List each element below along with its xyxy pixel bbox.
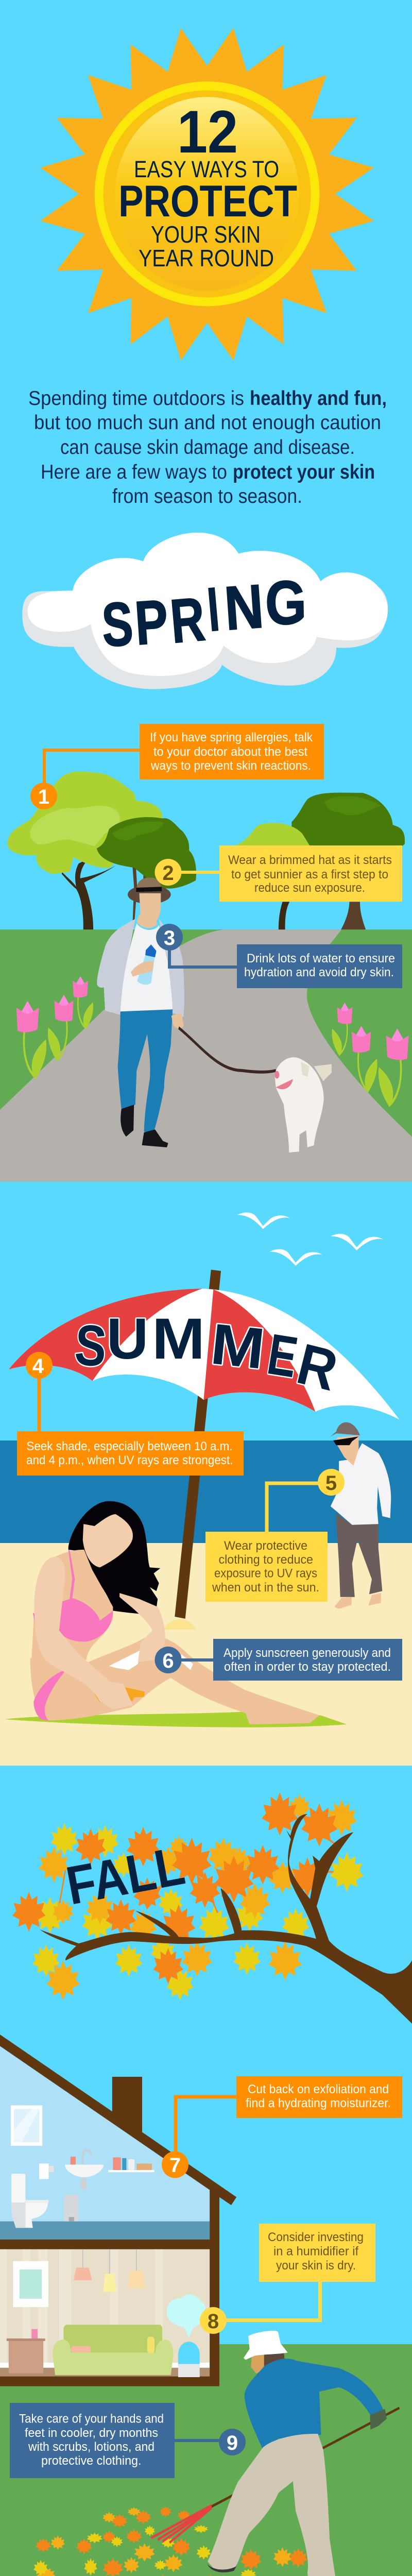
heading: spring: S <box>100 589 135 659</box>
callout 9: feet in cooler, dry months <box>25 2426 158 2440</box>
callout 5: when out in the sun. <box>212 1581 319 1595</box>
callout 6: 6 <box>162 1650 174 1672</box>
callout 7 <box>162 2076 402 2178</box>
callout 8 <box>200 2224 375 2334</box>
tulips <box>16 976 408 1107</box>
heading: summer: S <box>73 1312 109 1379</box>
callout 2: to get sunnier as a first step to <box>231 868 388 882</box>
callout 8: 8 <box>208 2310 219 2333</box>
icon: sun <box>40 28 374 361</box>
intro text: but too much sun and not enough caution <box>34 412 381 434</box>
callout 6 <box>154 1639 402 1681</box>
heading: summer: U <box>107 1307 148 1371</box>
panel: summer <box>0 1212 412 1766</box>
panel: header <box>28 28 387 507</box>
garden ground <box>0 2344 412 2576</box>
heading: summer: R <box>291 1331 344 1403</box>
intro text: can cause skin damage and disease. <box>60 436 355 459</box>
callout 8: in a humidifier if <box>273 2244 358 2259</box>
callout 8: your skin is dry. <box>276 2259 356 2273</box>
callout 1: 1 <box>38 786 49 808</box>
dog <box>274 1057 332 1153</box>
cloud <box>22 533 388 689</box>
callout 6: Apply sunscreen generously and <box>224 1646 391 1660</box>
callout 3: hydration and avoid dry skin. <box>244 965 394 979</box>
ground: grass and path <box>0 929 412 1181</box>
woman applying sunscreen <box>5 1501 347 1727</box>
callout 2: Wear a brimmed hat as it starts <box>228 853 392 867</box>
callout 7: 7 <box>169 2154 181 2177</box>
callout 5: Wear protective <box>224 1539 307 1553</box>
callout 5: exposure to UV rays <box>214 1566 317 1581</box>
heading: summer <box>73 1307 344 1403</box>
heading: summer: M <box>152 1307 205 1371</box>
intro text: Here are a few ways to <box>41 461 227 483</box>
autumn branch with leaves <box>12 1792 412 2024</box>
panel: spring <box>0 533 412 1181</box>
heading: summer: E <box>263 1321 302 1389</box>
callout 2: 2 <box>162 862 174 885</box>
roof and house frame <box>0 2035 236 2386</box>
heading: spring: R <box>168 584 208 656</box>
callout 3 <box>156 924 402 988</box>
leash <box>179 1028 276 1072</box>
sea and sand <box>0 1440 412 1766</box>
leaf pile <box>25 2506 308 2576</box>
heading: spring: G <box>265 568 307 638</box>
callout 5 <box>205 1469 345 1602</box>
man figure <box>151 2331 400 2576</box>
title: 12 <box>177 98 238 165</box>
callout 7: Cut back on exfoliation and <box>248 2082 389 2096</box>
callout 1: to your doctor about the best <box>153 745 307 759</box>
humidifier <box>167 2294 205 2377</box>
intro text: protect your skin <box>233 461 375 483</box>
living room <box>7 2249 174 2375</box>
callout 1 <box>30 724 324 809</box>
title: PROTECT <box>118 177 297 226</box>
trees <box>7 771 405 929</box>
heading: fall: FALL <box>62 1836 189 1917</box>
callout 2: reduce sun exposure. <box>254 881 365 895</box>
title: YOUR SKIN <box>151 221 261 248</box>
heading: spring: I <box>204 574 222 645</box>
callout 1: If you have spring allergies, talk <box>150 731 313 744</box>
callout 4: Seek shade, especially between 10 a.m. <box>27 1439 233 1453</box>
callout 5: 5 <box>325 1472 337 1495</box>
birds <box>237 1212 383 1266</box>
intro text <box>28 387 387 507</box>
callout 3: 3 <box>164 927 175 950</box>
callout 4: 4 <box>32 1355 44 1378</box>
callout 9 <box>10 2403 246 2478</box>
man raking leaves <box>25 2331 400 2576</box>
callout 4 <box>17 1352 244 1476</box>
bathroom fixtures <box>11 2150 154 2228</box>
intro text: from season to season. <box>112 485 302 507</box>
man walking with water bottle <box>97 877 184 1147</box>
callout 6: often in order to stay protected. <box>224 1660 391 1674</box>
intro text: healthy and fun, <box>250 387 387 410</box>
callout 9: protective clothing. <box>41 2454 141 2468</box>
callout 1: ways to prevent skin reactions. <box>150 759 311 773</box>
callout 9: 9 <box>227 2432 238 2454</box>
heading: spring: P <box>133 587 170 658</box>
bathroom window <box>11 2105 42 2146</box>
callout 9: Take care of your hands and <box>19 2412 164 2426</box>
callout 8: Consider investing <box>268 2230 364 2244</box>
house cutaway <box>0 2035 236 2386</box>
callout 7: find a hydrating moisturizer. <box>246 2096 391 2110</box>
man in white shirt <box>331 1422 391 1609</box>
title: EASY WAYS TO <box>134 156 279 182</box>
heading: spring <box>100 568 307 659</box>
intro text: Spending time outdoors is <box>28 387 244 410</box>
callout 4: and 4 p.m., when UV rays are strongest. <box>26 1453 233 1467</box>
heading: summer: M <box>208 1312 268 1381</box>
title: YEAR ROUND <box>139 245 274 272</box>
callout 5: clothing to reduce <box>218 1553 313 1567</box>
heading: spring: N <box>222 572 266 643</box>
callout 3: Drink lots of water to ensure <box>247 952 395 965</box>
callout 2 <box>154 845 402 902</box>
beach umbrella <box>9 1270 400 1630</box>
title <box>118 98 297 272</box>
panel: fall <box>0 1792 412 2576</box>
callout 9: with scrubs, lotions, and <box>28 2440 154 2454</box>
